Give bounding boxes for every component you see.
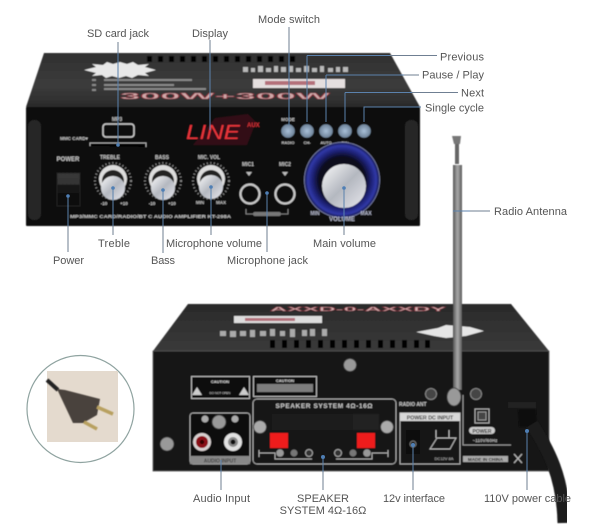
power block markings <box>463 395 522 463</box>
caution label right: CAUTION <box>276 378 294 383</box>
label: bass: Bass <box>151 255 176 267</box>
top screw <box>344 358 356 372</box>
label: pause / play: Pause / Play <box>422 70 484 82</box>
blue leader segments <box>68 53 527 472</box>
callout lines <box>66 27 529 490</box>
DC power input block: POWER DC INPUT <box>407 416 454 422</box>
equalizer graphic on lid <box>243 66 348 72</box>
label: speaker system: SPEAKER <box>297 493 349 505</box>
inset circle <box>27 356 134 462</box>
LED display: AUX <box>247 123 260 129</box>
power switch: POWER <box>57 157 80 163</box>
control buttons: MODE <box>281 117 295 122</box>
treble knob <box>95 155 131 206</box>
label: treble: Treble <box>98 238 130 250</box>
power cable <box>508 402 564 523</box>
plug head <box>518 409 537 427</box>
control buttons: CH+ <box>341 140 350 145</box>
radio antenna socket: RADIO ANT <box>399 402 427 408</box>
microphone jacks: MIC1 <box>242 162 254 168</box>
SD slot <box>60 136 146 147</box>
main volume knob: MIN <box>310 211 320 217</box>
radio antenna socket <box>399 388 482 408</box>
power rating on lid: 300W+300W <box>120 91 334 101</box>
caution label left: DO NOT OPEN <box>210 391 230 395</box>
left handle <box>28 120 41 220</box>
top face of rear unit <box>153 304 549 351</box>
label: single cycle: Single cycle <box>425 102 484 114</box>
plug inset <box>27 356 134 462</box>
label: audio input: Audio Input <box>193 493 250 505</box>
label: speaker system: SYSTEM 4Ω-16Ω <box>280 505 366 517</box>
power block markings: ~110V/60Hz <box>473 438 498 443</box>
microphone jacks: MIC2 <box>279 162 291 168</box>
rear power rating: AXXD-0-AXXDY <box>270 307 447 313</box>
antenna main mast <box>453 165 462 390</box>
bass knob: +10 <box>168 201 176 206</box>
right handle <box>405 120 418 220</box>
plug photo background <box>47 371 118 442</box>
bass knob <box>145 155 181 206</box>
white label on lid <box>253 79 345 88</box>
label: power: Power <box>53 255 84 267</box>
label: microphone volume: Microphone volume <box>166 238 262 250</box>
label: next: Next <box>461 88 484 100</box>
antenna thin section <box>455 144 459 164</box>
antenna tip <box>452 136 461 144</box>
speaker terminal block: SPEAKER SYSTEM 4Ω-16Ω <box>276 403 372 410</box>
top face of front unit <box>26 53 420 107</box>
model line: MP3/MMC CARD/RADIO/BT C AUDIO AMPLIFIER KT-298A <box>70 214 232 219</box>
ventilation slots <box>147 56 295 62</box>
USB port: MP3 <box>112 117 122 123</box>
rear white label <box>234 316 322 323</box>
feature list on lid <box>92 79 206 91</box>
caution label right <box>254 376 316 396</box>
rear panel <box>153 351 549 471</box>
label: display: Display <box>192 28 228 40</box>
microphone jacks <box>240 162 294 216</box>
DC power input block <box>400 413 460 464</box>
USB port <box>103 117 134 137</box>
label: microphone jack: Microphone jack <box>227 255 308 267</box>
label red marks <box>265 81 315 85</box>
SD slot: MMC CARD▾ <box>60 136 89 141</box>
gray leader segments <box>68 27 527 490</box>
anchor dots <box>66 143 529 459</box>
caution label left: CAUTION <box>211 379 229 384</box>
label: mode switch: Mode switch <box>258 14 320 26</box>
treble knob: +10 <box>120 201 128 206</box>
cable body <box>532 424 564 523</box>
cable socket <box>508 402 536 408</box>
radio antenna <box>447 136 462 406</box>
label: 12v interface: 12v interface <box>383 493 445 505</box>
bass knob: BASS <box>155 155 170 161</box>
power block markings: MADE IN CHINA <box>468 457 504 462</box>
front panel <box>26 107 420 226</box>
amplifier rear view <box>153 304 549 471</box>
label: SD card jack: SD card jack <box>87 28 150 40</box>
caution label left <box>192 376 250 398</box>
mic volume knob: MIC. VOL <box>198 155 220 161</box>
starburst logo <box>84 62 156 78</box>
mic volume knob: MIN <box>196 200 204 205</box>
main volume knob: MAX <box>360 211 372 217</box>
power switch <box>57 157 80 206</box>
control buttons <box>281 117 371 145</box>
control buttons: CH- <box>303 140 311 145</box>
treble knob: TREBLE <box>100 155 121 161</box>
power block markings: POWER <box>473 429 492 435</box>
rear slots <box>270 340 430 348</box>
speaker terminal block <box>253 399 396 464</box>
mic volume knob <box>193 155 229 205</box>
label: 110V power cable: 110V power cable <box>484 493 571 505</box>
mic volume knob: MAX <box>216 200 226 205</box>
audio input block: AUDIO INPUT <box>204 458 236 464</box>
DC power input block: DC12V 8A <box>435 456 454 461</box>
audio input block <box>190 413 250 464</box>
rear label red marks <box>245 318 295 321</box>
left cabinet screw <box>160 437 174 451</box>
amplifier front view <box>26 53 420 226</box>
LED display: LINE <box>186 122 241 144</box>
label: main volume: Main volume <box>313 238 376 250</box>
bass knob: -10 <box>149 201 156 206</box>
plug body <box>47 380 113 429</box>
LED display <box>157 113 268 145</box>
main volume knob: VOLUME <box>329 217 355 223</box>
antenna base nut <box>447 388 461 406</box>
label: previous: Previous <box>440 52 484 64</box>
rear equalizer graphic <box>220 329 327 337</box>
control buttons: AUTO <box>320 140 332 145</box>
rear starburst logo <box>416 325 484 338</box>
treble knob: -10 <box>101 201 108 206</box>
control buttons: RADIO <box>282 140 294 145</box>
label: radio antenna: Radio Antenna <box>494 206 568 218</box>
main volume knob <box>304 142 380 223</box>
